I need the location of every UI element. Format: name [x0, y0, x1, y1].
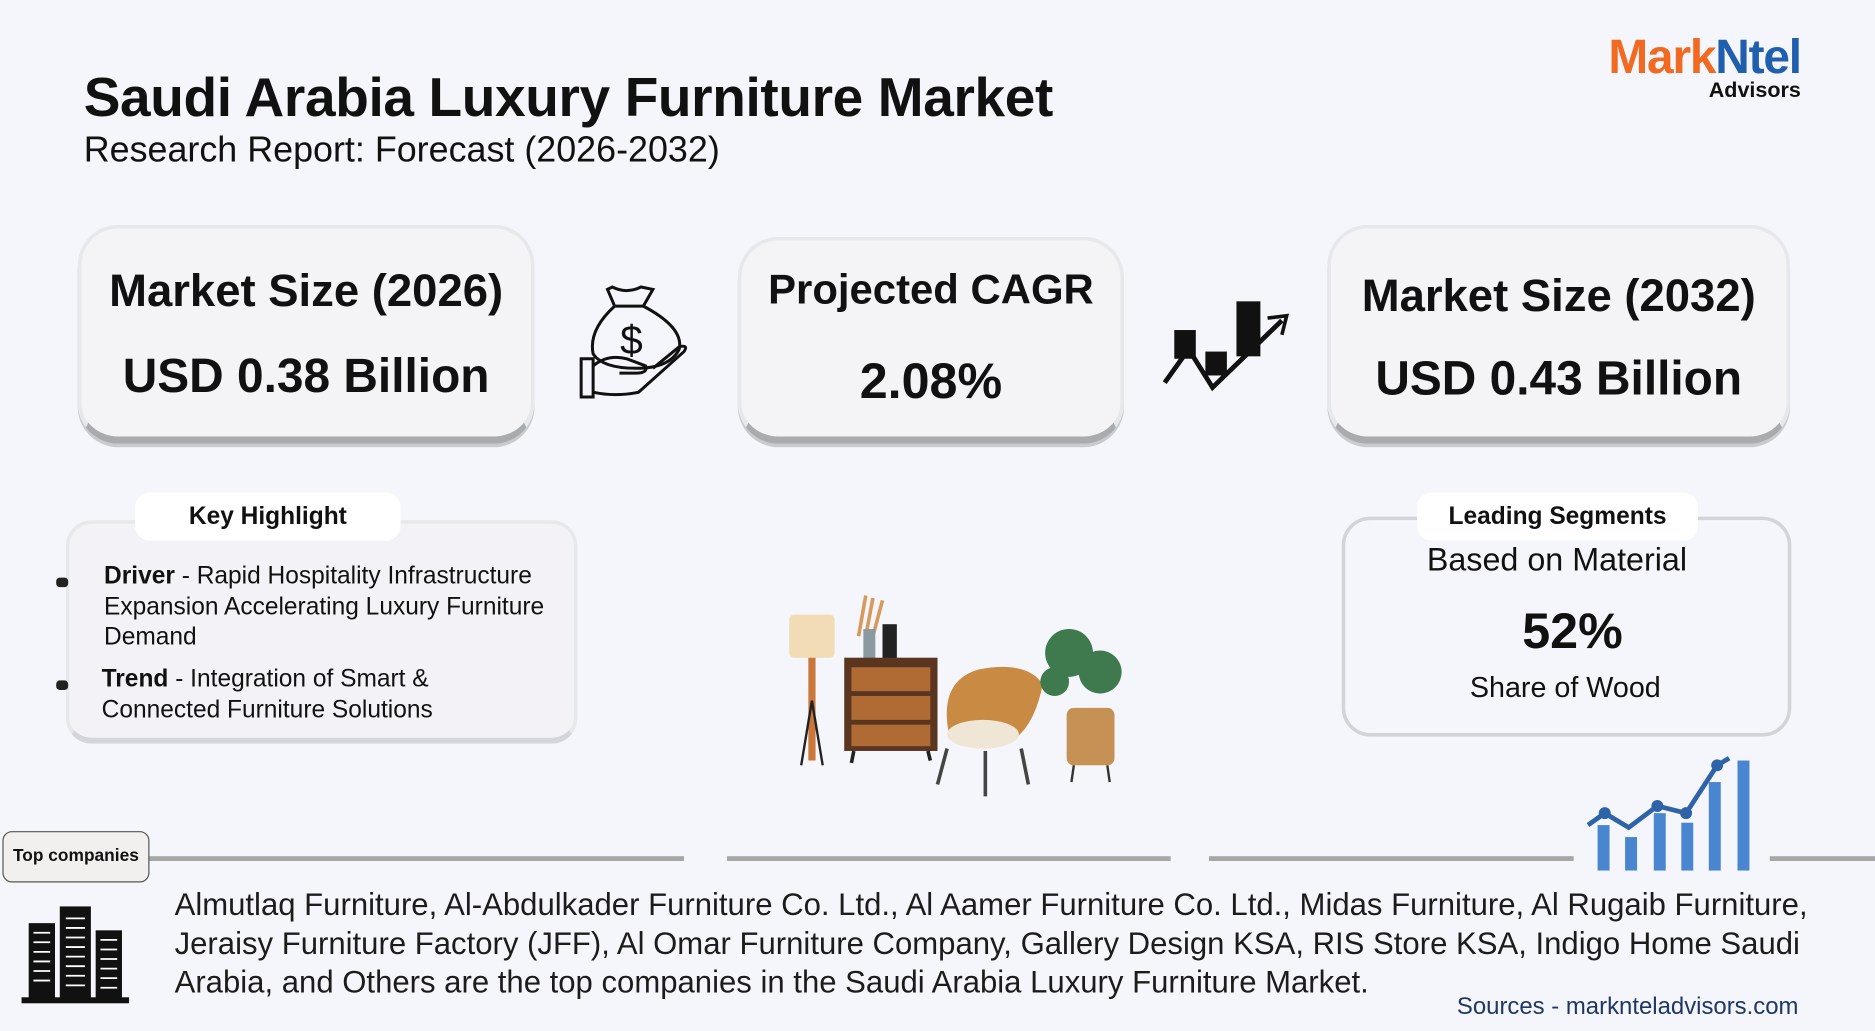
icon: money bag in hand [580, 285, 688, 398]
subtitle: Research Report: Forecast (2026-2032) [84, 130, 720, 170]
card: market size 2026 [78, 225, 535, 444]
text: share of wood: Share of Wood [1470, 672, 1661, 704]
card: projected CAGR: Projected CAGR [768, 267, 1094, 313]
card: market size 2032: USD 0.43 Billion [1375, 353, 1742, 405]
card: projected CAGR [738, 237, 1124, 444]
tab: key highlight: Key Highlight [189, 502, 347, 530]
card: projected CAGR: 2.08% [860, 353, 1002, 409]
bullet: driver: Driver - Rapid Hospitality Infrastructure Expansion Accelerating Luxury Furniture Demand [104, 562, 544, 651]
card: market size 2026: Market Size (2026) [109, 267, 503, 317]
label: top companies: Top companies [13, 847, 139, 866]
text: companies list: Almutlaq Furniture, Al-Abdulkader Furniture Co. Ltd., Al Aamer Furniture Co. Ltd., Midas Furniture, Al Rugaib Furniture, [175, 886, 1808, 922]
icon: money bag in hand: $ [620, 317, 643, 363]
text: sources: Sources - marknteladvisors.com [1457, 994, 1798, 1020]
card: market size 2032 [1327, 225, 1790, 444]
text: companies list [174, 886, 1808, 1000]
label: top companies [2, 831, 149, 883]
logo: Advisors [1709, 78, 1801, 102]
bullet: trend: Trend - Integration of Smart & [102, 665, 429, 692]
panel: leading segments [1342, 493, 1792, 737]
text: based on material: Based on Material [1427, 542, 1687, 578]
card: market size 2032: Market Size (2032) [1362, 271, 1756, 322]
tab: leading segments: Leading Segments [1449, 502, 1666, 530]
tab: key highlight [135, 493, 401, 541]
bullet: trend: Connected Furniture Solutions [102, 696, 433, 723]
icon: trend chart [1162, 301, 1289, 392]
value: 52%: 52% [1522, 603, 1623, 659]
bullet: trend [56, 665, 433, 723]
logo: MarkNtel [1608, 31, 1801, 84]
card: market size 2026: USD 0.38 Billion [123, 350, 490, 403]
text: companies list: Arabia, and Others are the top companies in the Saudi Arabia Luxury Furniture Market. [175, 964, 1369, 1000]
icon: blue bar chart [1586, 756, 1750, 871]
illustration: furniture [789, 595, 1122, 796]
tab: leading segments [1417, 493, 1698, 541]
title: Saudi Arabia Luxury Furniture Market [84, 66, 1053, 128]
icon: buildings [22, 906, 130, 1004]
text: companies list: Jeraisy Furniture Factory (JFF), Al Omar Furniture Company, Gallery Design KSA, RIS Store KSA, Indigo Home Saudi [175, 925, 1800, 961]
panel: key highlight [56, 493, 578, 744]
